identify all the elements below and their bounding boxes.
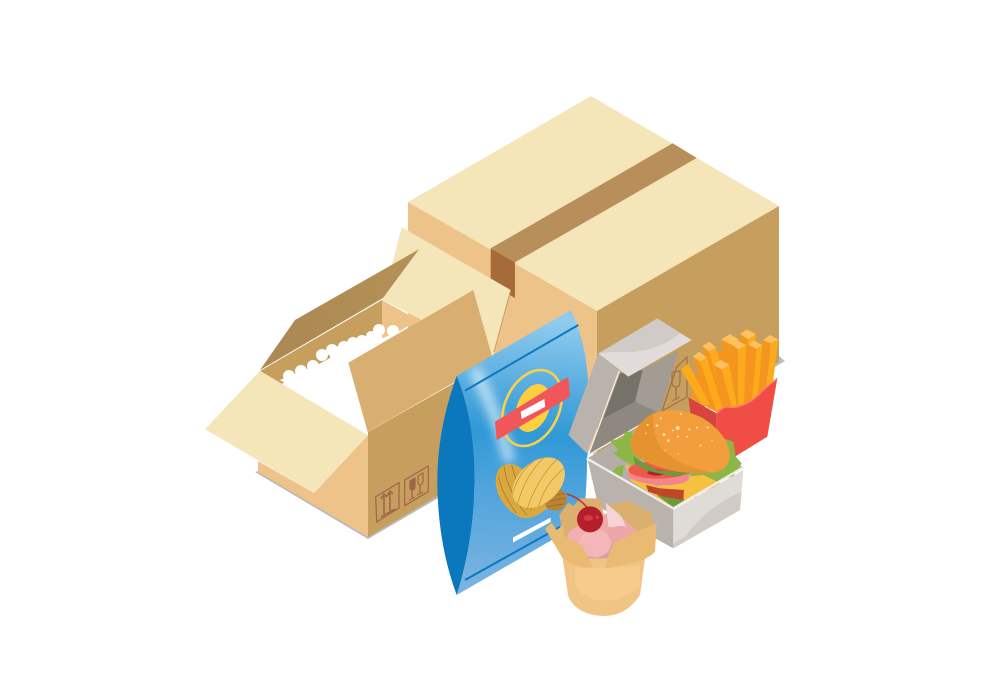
packing peanuts [280,324,400,431]
lid highlight [598,333,692,377]
right chip [543,488,567,511]
inner side wall [382,300,418,342]
cup body [563,558,645,616]
front flaps [545,523,593,567]
lid lower interior [588,402,660,455]
open lid [568,318,692,455]
ribbon [606,503,627,530]
cream [567,503,637,567]
fragile icon on large box [662,357,687,411]
cream left [567,526,599,547]
top bun [630,410,730,473]
logo ring [491,360,573,456]
back flap [383,227,511,357]
fries in a red carton [681,329,778,457]
lid shadow [603,370,643,418]
flap edge [494,290,511,352]
light streak [474,368,510,462]
base rim [587,458,743,508]
front chip [503,447,575,518]
cream centre [579,529,611,557]
lid top [598,318,692,377]
top seal line [465,325,578,391]
base left face [587,458,673,548]
packing tape top [491,143,697,262]
lettuce right [690,438,742,487]
logo [491,360,573,456]
carton rim [717,378,777,413]
base swoosh [673,492,742,548]
cheese spots [694,487,716,502]
front right face [368,360,495,537]
carton left side [688,397,717,450]
box base [587,458,743,548]
base right face [673,470,743,548]
cherry stem [567,494,590,512]
cream right [603,526,637,549]
cup inner highlight [575,566,640,601]
back chip [496,464,547,518]
green under bun [633,457,692,477]
potato chips [496,447,575,518]
chip bag [437,310,589,595]
lettuce left [610,432,640,477]
carton front [717,378,777,457]
base floor [587,415,743,508]
left open flap [205,371,368,493]
front left face [258,435,368,537]
ham [627,465,690,487]
white bar [513,518,551,542]
sesame seeds [645,413,713,455]
bag side gusset [437,376,475,595]
cream base [583,547,623,567]
box left face [408,202,597,456]
handling icon: fragile glasses [405,466,428,506]
raised dark flap [260,249,419,370]
box top face [408,96,779,311]
large cardboard box [408,96,785,470]
box shadow [770,356,785,369]
logo band [495,377,570,440]
cheese [625,463,721,507]
bag front panel [457,310,589,595]
inner back wall [260,300,382,385]
box right face [597,206,779,470]
lid interior [588,351,678,455]
illustration: packaging and food [205,96,785,616]
bottom seal line [465,527,560,580]
cream filler [568,513,637,558]
cherry [577,506,603,532]
burger box [568,318,743,548]
small open cardboard box [205,227,511,539]
logo centre [509,379,557,437]
burger [610,410,742,507]
tomato dark spot [647,470,666,476]
ground shadow [255,471,440,539]
bun shading [630,413,713,473]
right open flap [348,290,493,432]
fries [681,329,778,414]
logo white label [521,399,545,419]
lid inner edge [588,371,660,455]
patty [646,485,684,500]
bottom greens [657,495,685,507]
back flaps [559,498,653,543]
packing tape side [491,248,515,298]
cupcake in paper cup [545,494,657,616]
tomato [628,461,688,479]
handling icon: arrows up [376,483,399,522]
lid side [568,353,619,453]
